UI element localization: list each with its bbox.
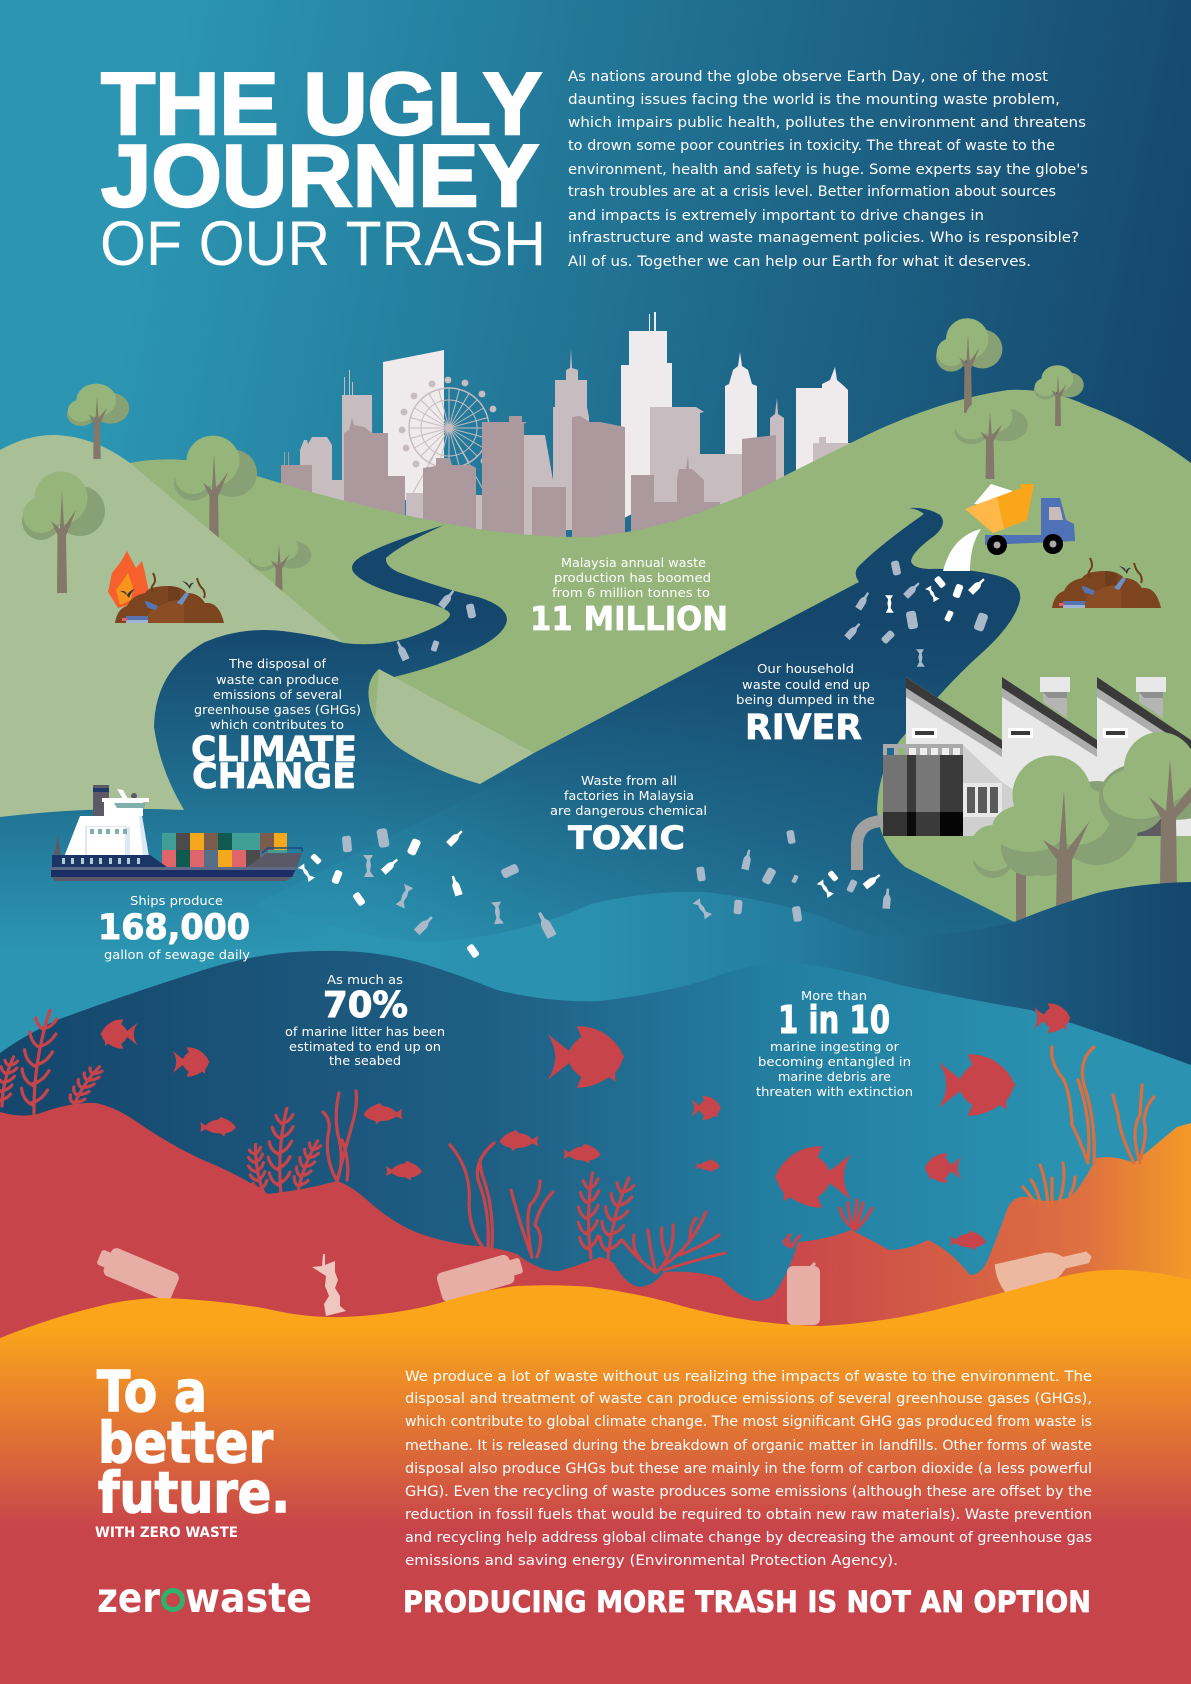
ferris wheel (399, 377, 496, 493)
callout: toxic: factories in Malaysia (564, 788, 694, 803)
callout: 11 million (530, 555, 728, 638)
callout: 70 percent: estimated to end up on (289, 1039, 441, 1054)
trash: apple core (312, 1254, 346, 1316)
callout: toxic: TOXIC (568, 819, 685, 857)
callout: climate change: emissions of several (213, 687, 342, 702)
callout: 1 in 10: marine ingesting or (770, 1039, 900, 1054)
tagline: PRODUCING MORE TRASH IS NOT AN OPTION (403, 1585, 1091, 1619)
callout: river: Our household (757, 661, 854, 676)
icon: fire (108, 551, 149, 608)
callout: 11 million: production has boomed (554, 570, 711, 585)
green hill (130, 390, 1191, 1000)
heading: to a better future: WITH ZERO WASTE (95, 1525, 238, 1541)
heading: to a better future: future. (98, 1461, 290, 1526)
body paragraph: disposal and treatment of waste can produce emissions of several greenhouse gases (GHGs), (405, 1391, 1092, 1407)
tree on green hill clipped by front hill (174, 436, 257, 551)
floating litter at sea (298, 828, 892, 959)
callout: toxic (550, 773, 707, 857)
sea wave band (256, 882, 1191, 1100)
intro paragraph: As nations around the globe observe Earth Day, one of the most (568, 69, 1048, 85)
callout: ships sewage: 168,000 (98, 908, 250, 948)
callout: ships sewage: gallon of sewage daily (104, 947, 251, 962)
callout: 11 million: Malaysia annual waste (561, 555, 706, 570)
callout: ships sewage (98, 893, 251, 962)
intro paragraph: daunting issues facing the world is the mounting waste problem, (568, 92, 1060, 108)
callout: 70 percent: 70% (323, 985, 408, 1026)
logo: zero waste (97, 1574, 312, 1622)
tree left top (67, 384, 129, 459)
intro paragraph: and impacts is extremely important to drive changes in (568, 208, 984, 224)
callout: river: RIVER (745, 708, 862, 748)
red seabed (0, 1103, 1191, 1350)
callout: river: being dumped in the (736, 692, 875, 707)
heading: to a better future: better (98, 1411, 273, 1476)
callout: river: waste could end up (742, 677, 870, 692)
callout: 70 percent: of marine litter has been (285, 1024, 445, 1039)
callout: 70 percent (285, 972, 445, 1068)
body paragraph (405, 1369, 1092, 1569)
light green wedge (370, 669, 534, 790)
lighter diagonal water wedge (254, 762, 706, 942)
trash: can (787, 1262, 820, 1325)
light green left hill (0, 435, 344, 830)
callout: 1 in 10: 1 in 10 (778, 998, 890, 1042)
tree crescent right (955, 399, 1028, 479)
callout: 1 in 10: threaten with extinction (756, 1084, 913, 1099)
callout: climate change: CHANGE (192, 757, 356, 797)
callout: climate change: waste can produce (216, 672, 339, 687)
intro paragraph (568, 69, 1088, 270)
intro paragraph: which impairs public health, pollutes the environment and threatens (568, 115, 1086, 131)
intro paragraph: All of us. Together we can help our Earth for what it deserves. (568, 254, 1031, 270)
body paragraph: emissions and saving energy (Environmental Protection Agency). (405, 1553, 898, 1569)
city skyline (281, 312, 866, 560)
intro paragraph: infrastructure and waste management policies. Who is responsible? (568, 230, 1079, 246)
callout: 1 in 10: marine debris are (778, 1069, 891, 1084)
body paragraph: GHG). Even the recycling of waste produces some emissions (although these are offset by the (405, 1484, 1092, 1500)
tree big in front of factory (992, 756, 1139, 910)
trash: glass bottle (994, 1243, 1095, 1294)
logo: zero waste: zer (97, 1574, 161, 1622)
tree right in front of factory (1099, 732, 1191, 884)
intro paragraph: environment, health and safety is huge. Some experts say the globe's (568, 162, 1088, 178)
fish school (100, 1003, 1070, 1250)
intro paragraph: to drown some poor countries in toxicity. The threat of waste to the (568, 138, 1055, 154)
heading: to a better future: To a (97, 1360, 207, 1425)
callout: toxic: Waste from all (581, 773, 677, 788)
callout: climate change: greenhouse gases (GHGs) (194, 702, 361, 717)
callout: 11 million: 11 MILLION (530, 599, 728, 638)
deep sea wave (0, 951, 1191, 1350)
title (100, 54, 546, 279)
tree far right (1034, 365, 1084, 426)
logo: zero waste: waste (185, 1574, 312, 1622)
body paragraph: reduction in fossil fuels that would be required to obtain new raw materials). Waste prevention (405, 1507, 1092, 1523)
body paragraph: which contribute to global climate change. The most significant GHG gas produced from waste is (405, 1414, 1092, 1430)
title: JOURNEY (101, 126, 539, 225)
tree hilltop right (936, 318, 1002, 413)
white waste spill (943, 529, 981, 571)
floating litter upper rivers (394, 560, 989, 667)
tree small behind factory tree (970, 825, 1026, 925)
body paragraph: and recycling help address global climate change by decreasing the amount of greenhouse gas (405, 1530, 1092, 1546)
callout: 1 in 10: More than (801, 988, 867, 1003)
orange to red sea floor (0, 1270, 1191, 1684)
icon: garbage pile right (1052, 558, 1161, 608)
truck (965, 484, 1075, 555)
title: THE UGLY (101, 54, 542, 153)
seaweed and coral (0, 1007, 872, 1273)
callout: toxic: are dangerous chemical (550, 803, 707, 818)
callout: 11 million: from 6 million tonnes to (552, 585, 710, 600)
cargo ship (50, 785, 302, 881)
callout: climate change: which contributes to (210, 717, 344, 732)
callout: 70 percent: the seabed (329, 1053, 401, 1068)
callout: 1 in 10: becoming entangled in (758, 1054, 911, 1069)
callout: 1 in 10 (756, 988, 913, 1099)
callout: climate change: The disposal of (228, 656, 327, 671)
body paragraph: We produce a lot of waste without us realizing the impacts of waste to the environment. The (405, 1369, 1092, 1385)
callout: climate change: CLIMATE (191, 730, 357, 770)
tree left large (22, 472, 105, 593)
body paragraph: methane. It is released during the breakdown of organic matter in landfills. Other forms of waste (405, 1438, 1092, 1454)
trash: plastic bottle left (93, 1243, 181, 1302)
icon: garbage pile left (115, 573, 224, 623)
heading: to a better future (95, 1360, 290, 1541)
crescent tree on green hill (249, 533, 311, 600)
pipe (857, 821, 883, 870)
orange kelp (1023, 1047, 1154, 1205)
trash: plastic bottle middle (435, 1251, 525, 1303)
title: OF OUR TRASH (100, 209, 546, 279)
callout: river (736, 661, 875, 748)
callout: 70 percent: As much as (327, 972, 403, 987)
water river and sea (0, 508, 1191, 1100)
body paragraph: disposal also produce GHGs but these are mainly in the form of carbon dioxide (a less powerful (405, 1461, 1092, 1477)
factory (857, 677, 1191, 870)
intro paragraph: trash troubles are at a crisis level. Better information about sources (568, 184, 1056, 200)
callout: climate change (191, 656, 361, 797)
callout: ships sewage: Ships produce (130, 893, 223, 908)
